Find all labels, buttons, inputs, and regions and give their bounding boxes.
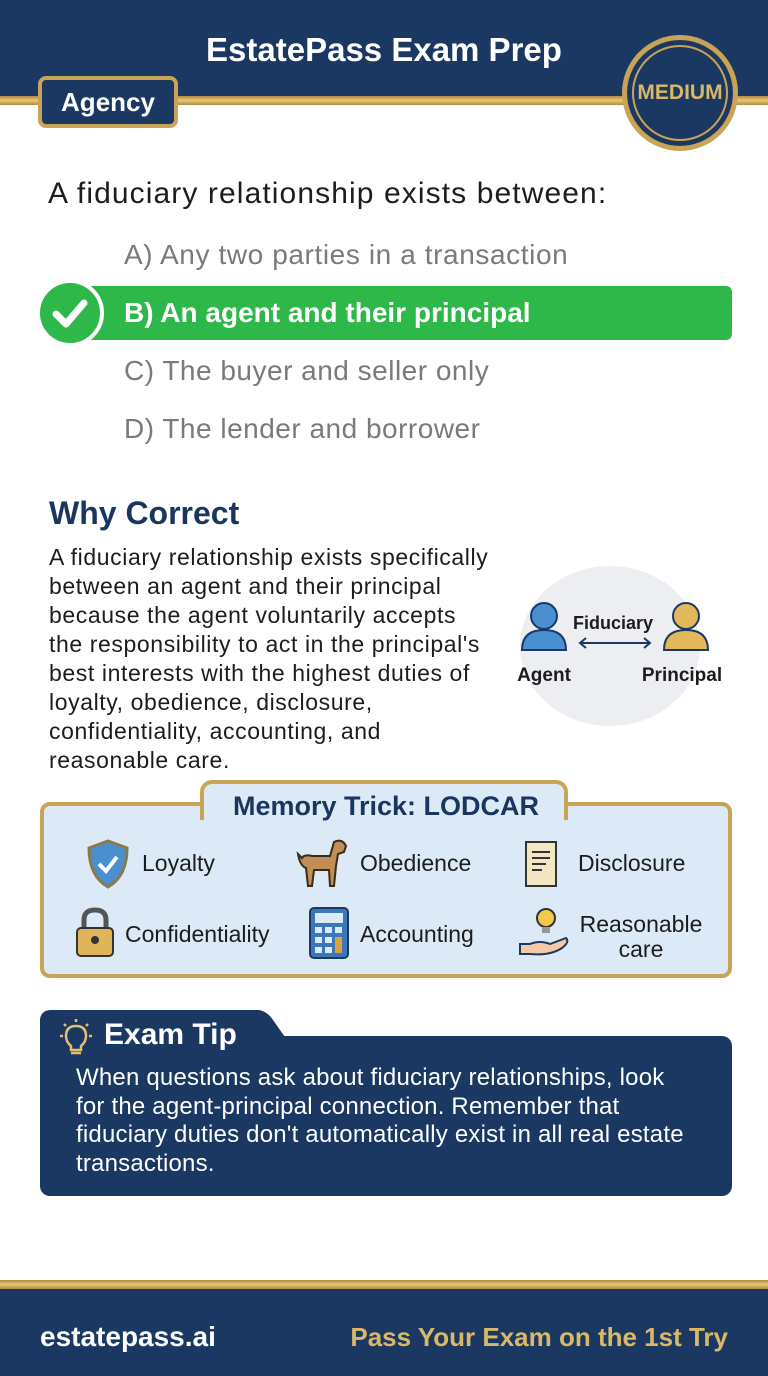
icon: check (36, 279, 104, 347)
explanation text: reasonable care. (49, 747, 230, 773)
title: EstatePass Exam Prep (206, 31, 562, 68)
illustration: agent principal: Fiduciary (573, 613, 653, 633)
panel: memory trick: Confidentiality (125, 921, 269, 947)
tip text: When questions ask about fiduciary relationships, look (76, 1064, 664, 1091)
option C: C) The buyer and seller only (124, 355, 489, 386)
tip text (76, 1064, 684, 1176)
explanation text: the responsibility to act in the principal's (49, 631, 480, 657)
icon: dog (296, 840, 348, 887)
icon: lock (76, 908, 114, 957)
explanation text: A fiduciary relationship exists specifically (49, 544, 488, 570)
panel: memory trick: Accounting (360, 921, 474, 947)
tip text: for the agent-principal connection. Remember that (76, 1092, 619, 1120)
panel: memory trick: Loyalty (142, 850, 215, 876)
heading: why correct: Why Correct (49, 495, 239, 531)
panel: memory trick: Obedience (360, 850, 471, 876)
illustration: agent principal: Principal (642, 665, 722, 686)
panel: exam tip (40, 1010, 732, 1196)
explanation text: best interests with the highest duties of (49, 660, 470, 686)
icon: lightbulb (60, 1019, 92, 1054)
option B correct (60, 286, 732, 340)
footer (0, 1280, 768, 1289)
badge: medium (622, 35, 738, 151)
footer left: estatepass.ai (40, 1321, 216, 1352)
tag: Agency: Agency (61, 87, 155, 117)
illustration: agent principal (517, 566, 722, 726)
icon: shield (88, 839, 128, 889)
footer right: Pass Your Exam on the 1st Try (350, 1322, 728, 1352)
memory title: Memory Trick: LODCAR (233, 791, 539, 821)
tip heading: Exam Tip (104, 1018, 237, 1051)
options (40, 239, 732, 444)
option D: D) The lender and borrower (124, 413, 480, 444)
explanation text: between an agent and their principal (49, 573, 441, 599)
icon: document (525, 841, 557, 887)
icon: bulb hand (519, 908, 568, 956)
panel: memory trick: Reasonable care (580, 911, 702, 962)
explanation text: confidentiality, accounting, and (49, 718, 381, 744)
explanation text: loyalty, obedience, disclosure, (49, 689, 373, 715)
question: A fiduciary relationship exists between: (48, 177, 607, 210)
panel: memory trick (40, 780, 732, 978)
illustration: agent principal: Agent (517, 665, 572, 686)
explanation text: because the agent voluntarily accepts (49, 602, 456, 628)
panel: memory trick: Disclosure (578, 850, 685, 876)
explanation text (49, 544, 488, 773)
icon: calculator (309, 907, 349, 959)
tag: Agency (38, 76, 178, 128)
option A: A) Any two parties in a transaction (124, 239, 568, 270)
tip text: fiduciary duties don't automatically exist in all real estate (76, 1121, 684, 1148)
badge: medium: MEDIUM (637, 81, 723, 104)
tip text: transactions. (76, 1150, 215, 1176)
options: B) An agent and their principal (124, 297, 531, 328)
header band (0, 0, 768, 98)
